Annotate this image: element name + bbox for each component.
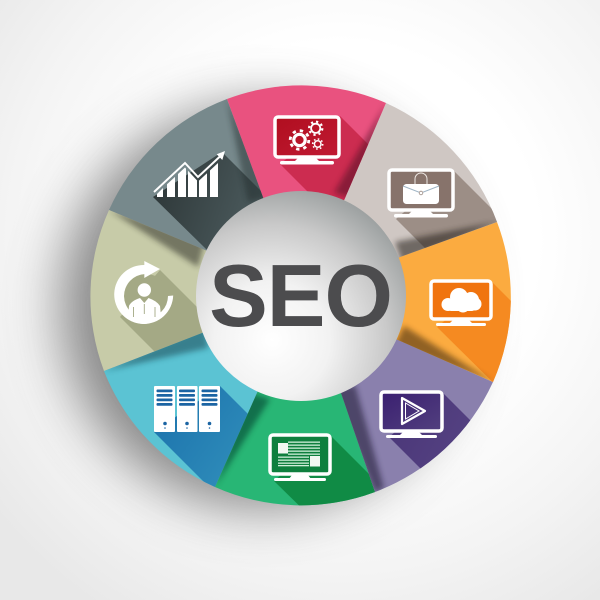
- long shadow: monitor: [437, 282, 511, 382]
- center ball: [196, 191, 406, 401]
- icon: briefcase monitor: [389, 170, 453, 218]
- segment: purple video: [341, 340, 493, 492]
- segment: blue servers: [104, 332, 258, 487]
- segment: beige briefcase: [344, 103, 497, 258]
- segment: pink settings: [227, 85, 386, 200]
- long shadow: monitor: [274, 433, 375, 506]
- wheel drop shadow: [60, 103, 466, 509]
- long shadow: monitor: [396, 171, 497, 248]
- long shadow: servers: [154, 386, 248, 487]
- title: SEO: SEO: [209, 246, 392, 345]
- segment: gray analytics: [109, 99, 264, 250]
- long shadow: refresh: [120, 270, 202, 352]
- icon: growth chart: [154, 151, 225, 197]
- icon: layout monitor: [270, 435, 330, 481]
- icon: refresh person: [114, 261, 173, 324]
- icon: servers: [154, 386, 220, 432]
- icon: gears monitor: [275, 117, 339, 164]
- long shadow: chart: [153, 152, 264, 250]
- segment: orange cloud: [396, 222, 511, 382]
- icon: video monitor: [381, 392, 442, 438]
- long shadow: monitor: [280, 116, 368, 200]
- segment: olive refresh: [90, 210, 206, 371]
- segment: green layout: [215, 392, 375, 506]
- icon: cloud monitor: [431, 281, 491, 326]
- long shadow: monitor: [390, 393, 470, 468]
